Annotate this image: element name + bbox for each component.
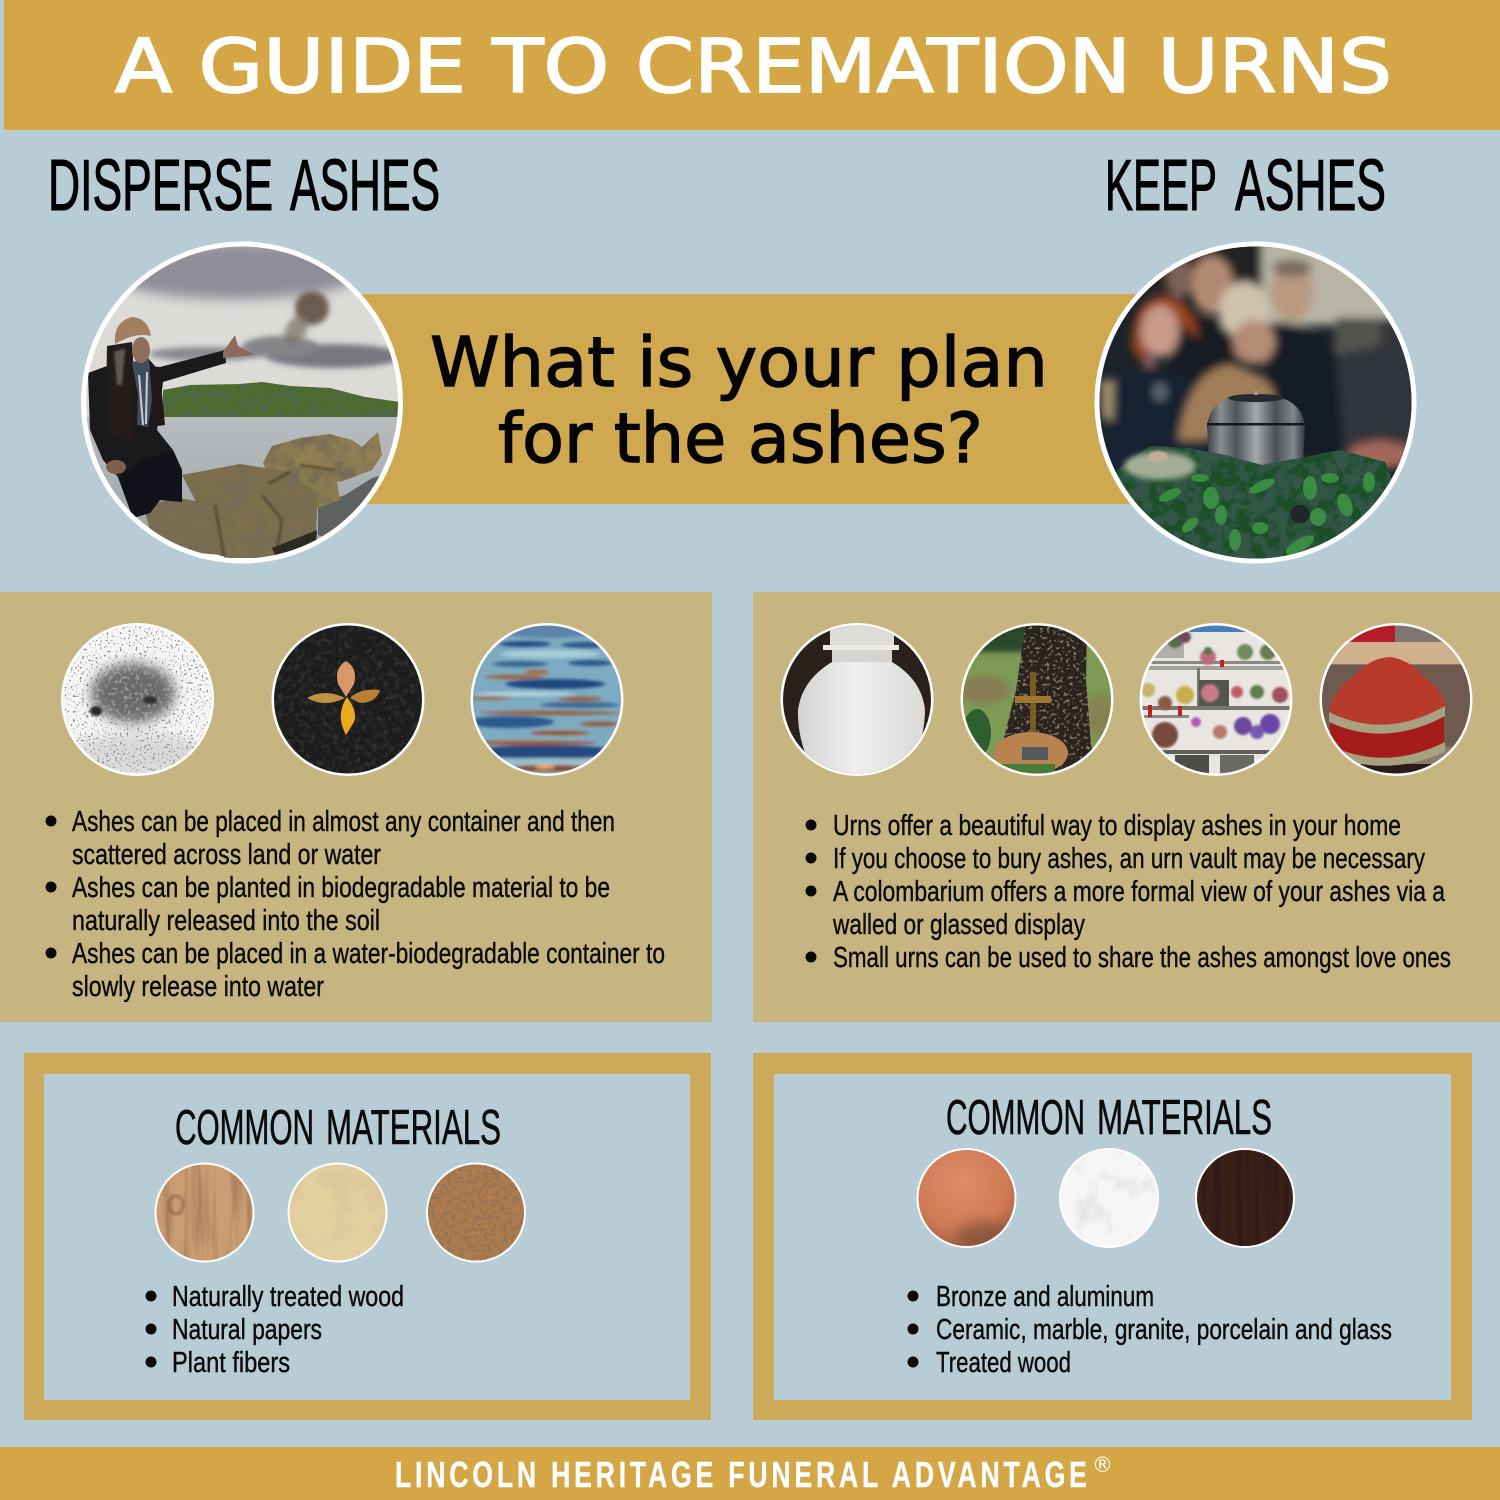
central question band [360, 294, 1150, 504]
swatch: paper [285, 1160, 390, 1265]
footer band [0, 1447, 1500, 1500]
disperse bullet list [46, 806, 665, 1003]
disperse materials list: Natural papers [172, 1314, 322, 1346]
woman [88, 317, 255, 518]
panel: keep options [753, 592, 1500, 1022]
photo: memorial cross at a tree [960, 622, 1115, 778]
disperse bullet list: scattered across land or water [72, 839, 381, 871]
heading: common materials: COMMON [946, 1091, 1085, 1145]
heading: common materials: MATERIALS [1097, 1091, 1272, 1145]
heading: common materials: MATERIALS [326, 1101, 501, 1155]
disperse bullet list: slowly release into water [72, 971, 324, 1003]
rocks [143, 432, 382, 558]
swatch: plant fiber [424, 1160, 529, 1265]
photo: white urn [780, 622, 935, 780]
heading: common materials: COMMON [175, 1101, 314, 1155]
disperse bullet list: Ashes can be placed in almost any container and then [72, 806, 615, 838]
registered mark: ® [1092, 1453, 1113, 1477]
keep materials list: Treated wood [936, 1347, 1071, 1379]
heading: disperse ashes: DISPERSE [48, 146, 273, 226]
photo: columbarium wall [1139, 622, 1294, 777]
panel: keep materials [753, 1053, 1472, 1420]
heading: disperse ashes: ASHES [290, 146, 440, 226]
keep bullet list [806, 810, 1451, 974]
urn [1207, 391, 1305, 465]
heading: keep ashes: KEEP [1105, 146, 1217, 226]
heading: keep ashes: ASHES [1235, 146, 1386, 226]
photo: mourners with an urn [1094, 240, 1432, 570]
photo: ashes pile [60, 622, 215, 777]
question text: for the ashes? [498, 399, 983, 479]
question text: What is your plan [430, 323, 1048, 403]
photo: leaves on soil [270, 622, 426, 778]
title: A GUIDE TO CREMATION URNS [115, 24, 1392, 110]
disperse bullet list: naturally released into the soil [72, 905, 380, 937]
disperse materials list [146, 1281, 404, 1379]
dark water by rocks [318, 476, 380, 536]
keep bullet list: walled or glassed display [832, 909, 1085, 941]
footer brand text: LINCOLN HERITAGE FUNERAL ADVANTAGE [395, 1454, 1087, 1495]
disperse bullet list: Ashes can be placed in a water-biodegradable container to [72, 938, 665, 970]
photo: rippling water [462, 622, 626, 778]
header banner [4, 0, 1500, 130]
ash plume [280, 288, 333, 346]
swatch: dark wood [1194, 1147, 1296, 1249]
swatch: wood [154, 1162, 254, 1262]
keep materials list [908, 1281, 1392, 1379]
swatch: marble [1058, 1147, 1160, 1249]
swatch: copper [916, 1148, 1016, 1250]
photo: red heart urn [1319, 622, 1475, 778]
treeline [163, 382, 400, 417]
disperse bullet list: Ashes can be planted in biodegradable material to be [72, 872, 610, 904]
foliage [1117, 446, 1392, 570]
panel: disperse materials [24, 1053, 711, 1420]
panel: disperse options [0, 592, 712, 1022]
keep materials list: Bronze and aluminum [936, 1281, 1154, 1313]
disperse materials list: Naturally treated wood [172, 1281, 404, 1313]
disperse materials list: Plant fibers [172, 1347, 290, 1379]
photo: woman scattering ashes by a lake [80, 240, 405, 564]
